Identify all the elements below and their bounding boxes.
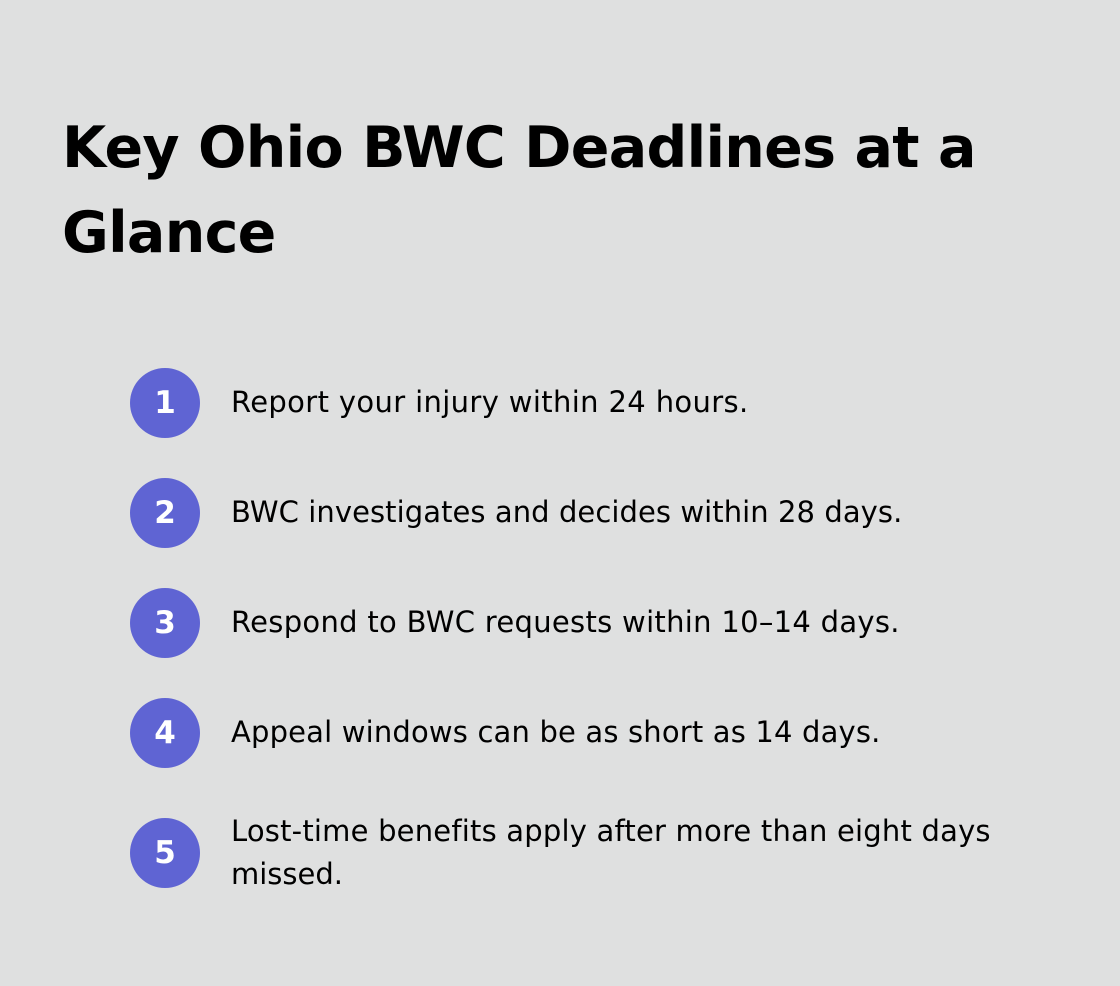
list item 4 <box>130 698 881 768</box>
list item 1 <box>130 368 749 438</box>
number badge 4: 4 <box>154 715 176 751</box>
list item 3 <box>130 588 900 658</box>
text 5: Lost-time benefits apply after more than eight days <box>231 814 991 848</box>
number badge 1: 1 <box>154 385 176 421</box>
text 5 <box>231 814 991 891</box>
text 1: Report your injury within 24 hours. <box>231 385 749 419</box>
number badge 3: 3 <box>154 605 176 641</box>
number badge 4 <box>130 698 200 768</box>
title: Key Ohio BWC Deadlines at a <box>62 115 976 181</box>
title: Glance <box>62 200 276 266</box>
number badge 5: 5 <box>154 835 176 871</box>
number badge 1 <box>130 368 200 438</box>
number badge 3 <box>130 588 200 658</box>
text 3: Respond to BWC requests within 10–14 days. <box>231 605 900 639</box>
number badge 5 <box>130 818 200 888</box>
number badge 2 <box>130 478 200 548</box>
text 2: BWC investigates and decides within 28 days. <box>231 495 902 529</box>
title <box>62 115 976 266</box>
list item 5 <box>130 814 991 891</box>
text 4: Appeal windows can be as short as 14 days. <box>231 715 881 749</box>
number badge 2: 2 <box>154 495 176 531</box>
text 5: missed. <box>231 857 343 891</box>
list item 2 <box>130 478 902 548</box>
